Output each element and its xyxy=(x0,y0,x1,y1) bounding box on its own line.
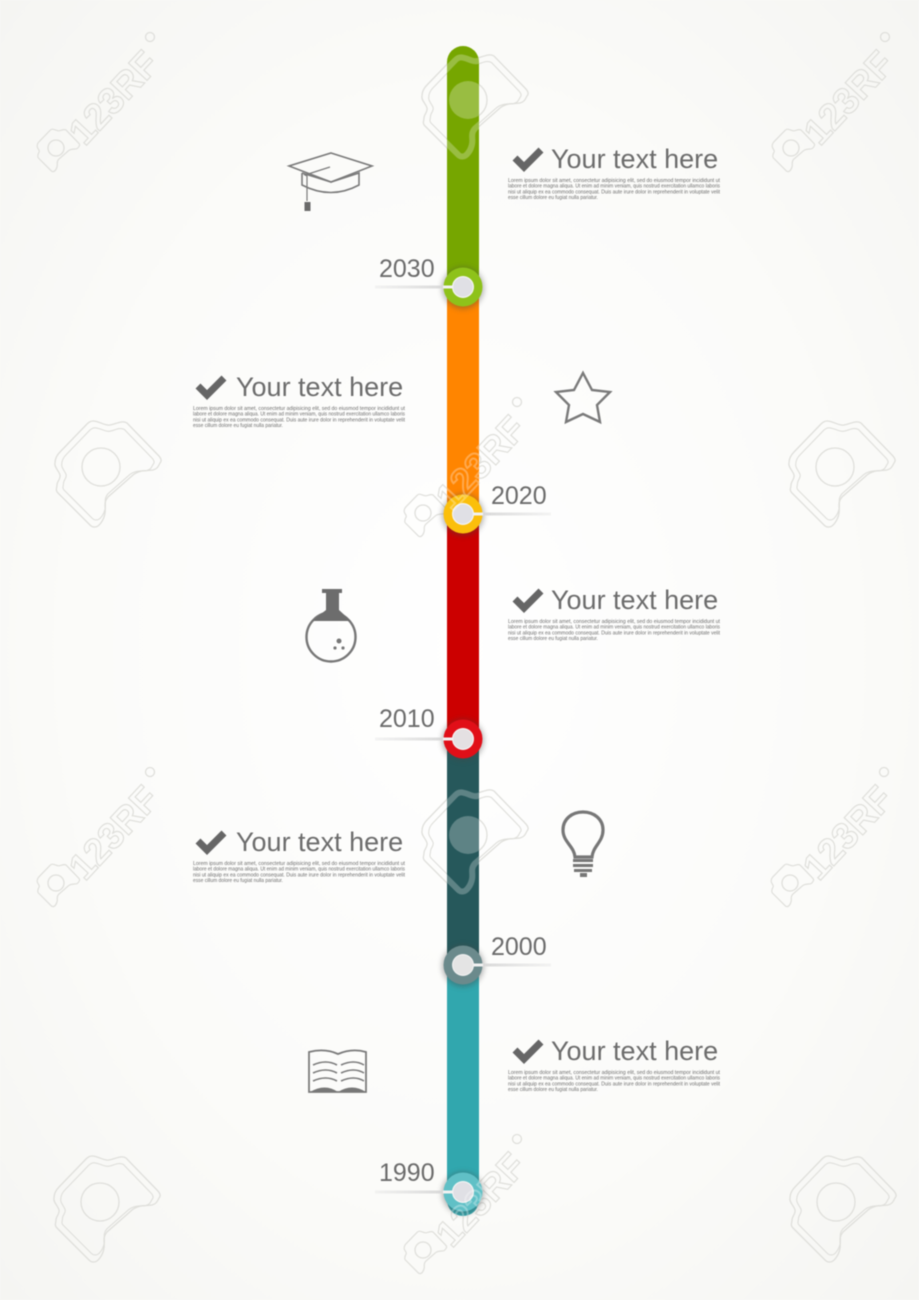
icon: check mark xyxy=(515,591,541,608)
icon: check mark xyxy=(198,378,224,395)
logo top left: 123RF xyxy=(61,43,167,152)
body text: esse cillum dolore eu fugiat nulla pariatur. xyxy=(508,195,598,201)
segment: dark teal xyxy=(447,739,479,965)
body text: nisi ut aliquip ex ea commodo consequat. Duis aute irure dolor in reprehenderit in voluptate velit xyxy=(508,189,721,195)
year label 2000: 2000 xyxy=(491,933,547,961)
year label 2020: 2020 xyxy=(491,482,547,510)
body text: labore et dolore magna aliqua. Ut enim ad minim veniam, quis nostrud exercitation ullamco laboris xyxy=(508,625,720,631)
highlight top egg xyxy=(446,54,480,160)
heading: Your text here xyxy=(551,1036,718,1066)
body text: nisi ut aliquip ex ea commodo consequat. Duis aute irure dolor in reprehenderit in voluptate velit xyxy=(193,417,406,423)
body text: esse cillum dolore eu fugiat nulla pariatur. xyxy=(508,1087,598,1093)
logo top right xyxy=(772,32,902,172)
egg middle left xyxy=(55,421,161,527)
text block: right 2 xyxy=(508,585,721,642)
icon: check mark xyxy=(198,833,224,850)
node 2010 xyxy=(375,705,484,761)
icon: open book xyxy=(309,1050,366,1092)
body text: labore et dolore magna aliqua. Ut enim ad minim veniam, quis nostrud exercitation ullamco laboris xyxy=(508,184,720,190)
body text: labore et dolore magna aliqua. Ut enim ad minim veniam, quis nostrud exercitation ullamco laboris xyxy=(193,412,405,418)
node 1990 xyxy=(375,1159,484,1214)
highlight logo lower: 123RF xyxy=(428,1145,534,1254)
icon: flask xyxy=(306,589,356,662)
body text: Lorem ipsum dolor sit amet, consectetur adipisicing elit, sed do eiusmod tempor incididunt ut xyxy=(508,619,721,625)
timeline tube xyxy=(447,46,479,1216)
year label 2030: 2030 xyxy=(379,255,435,283)
node 2020 xyxy=(442,482,551,536)
egg behind tube lower xyxy=(422,789,528,895)
segment: red xyxy=(447,514,479,739)
logo top left xyxy=(37,32,167,172)
egg behind tube top xyxy=(422,54,528,160)
egg bottom right xyxy=(790,1156,896,1262)
logo top right: 123RF xyxy=(796,43,902,152)
node 2030 xyxy=(375,255,484,309)
text block: left 1 xyxy=(193,372,406,429)
body text: nisi ut aliquip ex ea commodo consequat. Duis aute irure dolor in reprehenderit in voluptate velit xyxy=(508,630,721,636)
body text: nisi ut aliquip ex ea commodo consequat. Duis aute irure dolor in reprehenderit in voluptate velit xyxy=(193,872,406,878)
body text: nisi ut aliquip ex ea commodo consequat. Duis aute irure dolor in reprehenderit in voluptate velit xyxy=(508,1081,721,1087)
icon: light bulb xyxy=(563,812,603,877)
heading: Your text here xyxy=(551,585,718,615)
segment: green xyxy=(447,46,479,286)
icon: star xyxy=(556,373,610,422)
body text: esse cillum dolore eu fugiat nulla pariatur. xyxy=(508,636,598,642)
logo centre lower: 123RF xyxy=(428,1145,534,1254)
segment: orange xyxy=(447,286,479,514)
body text: Lorem ipsum dolor sit amet, consectetur adipisicing elit, sed do eiusmod tempor incididunt ut xyxy=(508,178,721,184)
body text xyxy=(193,861,406,884)
node 2000 xyxy=(442,933,551,987)
icon: check mark xyxy=(515,1042,541,1059)
egg bottom left xyxy=(54,1156,160,1262)
body text: labore et dolore magna aliqua. Ut enim ad minim veniam, quis nostrud exercitation ullamco laboris xyxy=(193,867,405,873)
body text: esse cillum dolore eu fugiat nulla pariatur. xyxy=(193,423,283,429)
highlight lower egg xyxy=(446,789,480,895)
logo centre upper: 123RF xyxy=(428,408,534,517)
body text: Lorem ipsum dolor sit amet, consectetur adipisicing elit, sed do eiusmod tempor incididunt ut xyxy=(193,406,406,412)
body text: Lorem ipsum dolor sit amet, consectetur adipisicing elit, sed do eiusmod tempor incididunt ut xyxy=(508,1070,721,1076)
body text xyxy=(508,619,721,642)
logo middle left xyxy=(37,768,167,907)
text block: right 1 xyxy=(508,144,721,201)
logo centre upper xyxy=(404,398,534,537)
text block: right 3 xyxy=(508,1036,721,1093)
heading: Your text here xyxy=(236,827,403,857)
segment: teal xyxy=(447,965,479,1216)
logo middle right xyxy=(771,768,901,907)
body text: Lorem ipsum dolor sit amet, consectetur adipisicing elit, sed do eiusmod tempor incididunt ut xyxy=(193,861,406,867)
body text: labore et dolore magna aliqua. Ut enim ad minim veniam, quis nostrud exercitation ullamco laboris xyxy=(508,1076,720,1082)
logo centre lower xyxy=(404,1134,534,1274)
egg middle right xyxy=(789,421,895,527)
logo middle left: 123RF xyxy=(61,778,167,887)
highlight logo upper: 123RF xyxy=(428,408,534,517)
watermark: highlights on tube xyxy=(446,54,483,1216)
logo middle right: 123RF xyxy=(795,778,901,887)
year label 2010: 2010 xyxy=(379,705,435,733)
body text xyxy=(508,1070,721,1093)
text block: left 2 xyxy=(193,827,406,884)
heading: Your text here xyxy=(551,144,718,174)
icon: graduation cap xyxy=(289,153,372,211)
year label 1990: 1990 xyxy=(379,1159,435,1187)
body text: esse cillum dolore eu fugiat nulla pariatur. xyxy=(193,878,283,884)
heading: Your text here xyxy=(236,372,403,402)
body text xyxy=(193,406,406,429)
icon: check mark xyxy=(515,150,541,167)
body text xyxy=(508,178,721,201)
